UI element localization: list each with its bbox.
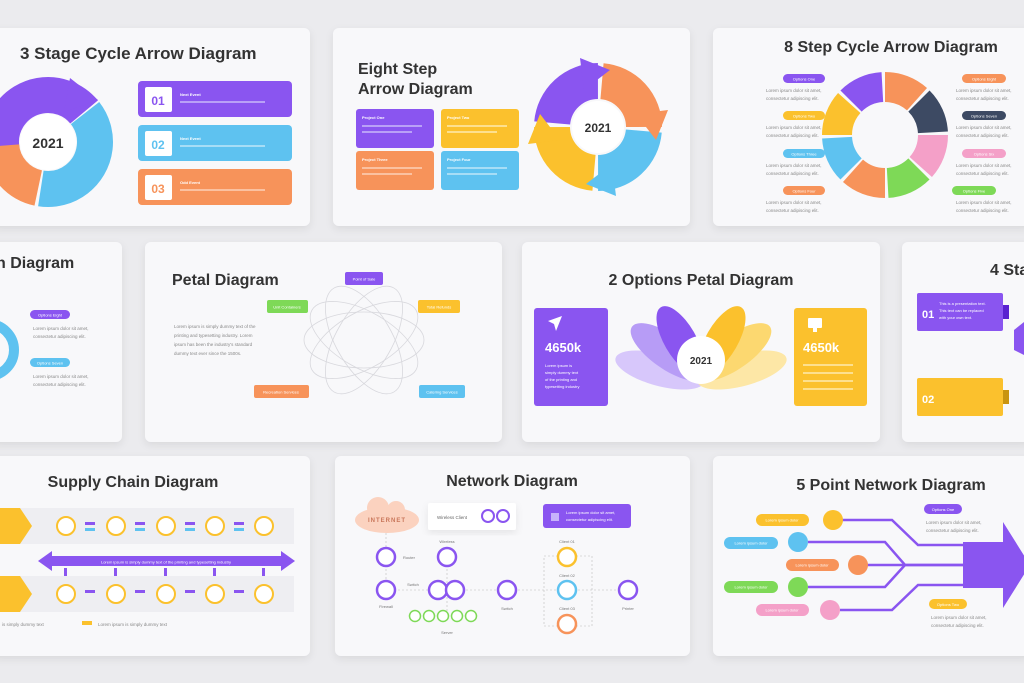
heading: supply chain: Supply Chain Diagram xyxy=(48,474,218,491)
box: stage 01: This text can be replaced xyxy=(939,308,984,313)
text: option one: consectetur adipiscing elit. xyxy=(926,528,979,533)
text block: petal description: ipsum has been the industry's standard xyxy=(174,342,253,347)
panel: 3 stage cycle arrow diagram xyxy=(0,28,310,226)
labels: left options: consectetur adipiscing elit. xyxy=(766,133,819,138)
card: purple stat: typesetting industry xyxy=(545,384,579,389)
labels: left options: Options Three xyxy=(791,152,817,156)
labels: right options: Lorem ipsum dolor sit amet, xyxy=(956,200,1012,205)
labels: options: consectetur adipiscing elit. xyxy=(33,382,86,387)
chart: 3 stage ring: 2021 xyxy=(32,135,64,151)
card: purple stat: 4650k xyxy=(545,340,582,355)
box: stage 01: with your own text. xyxy=(939,315,972,320)
text: option one: Lorem ipsum dolor sit amet, xyxy=(926,520,982,525)
heading: 3 stage: 3 Stage Cycle Arrow Diagram xyxy=(20,44,257,63)
labels: left options: Lorem ipsum dolor sit amet, xyxy=(766,88,822,93)
icon: internet cloud xyxy=(355,497,419,533)
labels: left options: consectetur adipiscing elit. xyxy=(766,171,819,176)
labels: right options xyxy=(952,74,1012,213)
labels: right options: consectetur adipiscing elit. xyxy=(956,208,1009,213)
labels: right options: Options Five xyxy=(963,188,986,194)
heading: network: Network Diagram xyxy=(446,473,578,490)
labels: left options xyxy=(766,74,825,213)
grid: four projects xyxy=(356,109,519,190)
text block: petal description: dummy text ever since the 1500s. xyxy=(174,351,241,356)
labels: petal nodes: Recreation Services xyxy=(263,390,299,394)
labels: options: Options Eight xyxy=(38,312,63,318)
panel: 4 stage cropped xyxy=(902,242,1024,442)
card: purple stat: Lorem ipsum is xyxy=(545,363,572,368)
labels: five pills: Lorem ipsum dolor xyxy=(765,608,799,612)
box: wireless client: Wireless Client xyxy=(437,515,468,520)
labels: right options: Options Six xyxy=(974,152,994,156)
callout: purple note: consectetur adipiscing elit. xyxy=(566,517,613,522)
labels: five pills: Lorem ipsum dolor xyxy=(734,540,768,546)
chart: network nodes: Server xyxy=(441,630,454,635)
card: yellow stat: 4650k xyxy=(803,340,840,355)
arrow: big purple xyxy=(963,522,1024,608)
legend: supply chain: Lorem ipsum is simply dummy text xyxy=(98,622,168,627)
panel: eight step arrow diagram xyxy=(333,28,690,226)
list: three events: 01 xyxy=(151,94,165,108)
labels: right options: Lorem ipsum dolor sit amet, xyxy=(956,163,1012,168)
chart: network nodes: Wireless xyxy=(439,539,455,544)
card: purple stat: of the printing and xyxy=(545,377,577,382)
box: wireless client xyxy=(428,503,516,530)
list: three events: Odd Event xyxy=(180,180,201,185)
box: stage 01: 01 xyxy=(922,309,934,321)
grid: four projects: Project Three xyxy=(362,157,388,162)
labels: left options: Lorem ipsum dolor sit amet, xyxy=(766,125,822,130)
labels: left options: Lorem ipsum dolor sit amet, xyxy=(766,200,822,205)
labels: options: Lorem ipsum dolor sit amet, xyxy=(33,374,89,379)
labels: right options: consectetur adipiscing elit. xyxy=(956,171,1009,176)
labels: left options: Lorem ipsum dolor sit amet, xyxy=(766,163,822,168)
row: bottom chain xyxy=(0,568,294,612)
panel: cropped diagram left xyxy=(0,242,122,442)
labels: petal nodes: Total Refunds xyxy=(427,304,451,310)
labels: left options: Options Four xyxy=(792,188,816,194)
arrow: double purple xyxy=(38,551,295,571)
heading: eight step: Arrow Diagram xyxy=(358,81,473,98)
labels: right options: consectetur adipiscing elit. xyxy=(956,96,1009,101)
heading: petal: Petal Diagram xyxy=(172,272,279,289)
callout: purple note: Lorem ipsum dolor sit amet, xyxy=(566,510,615,515)
chart: network nodes: Switch xyxy=(501,606,513,611)
labels: left options: Options Two xyxy=(793,114,816,118)
card: purple stat: simply dummy text xyxy=(545,370,579,375)
panel: 5 point network diagram xyxy=(713,456,1024,656)
text: option two xyxy=(929,599,987,628)
box: stage 01: This is a presentation text. xyxy=(939,301,986,306)
labels: options: Lorem ipsum dolor sit amet, xyxy=(33,326,89,331)
panel: network diagram xyxy=(335,456,690,656)
callout: purple note xyxy=(543,504,631,528)
chart: four arrow ring: 2021 xyxy=(585,121,612,135)
labels: petal nodes xyxy=(254,272,465,398)
text block: petal description: printing and typesetting industry. Lorem xyxy=(174,333,253,338)
labels: five pills: Lorem ipsum dolor xyxy=(734,584,768,590)
chart: network nodes: Client 03 xyxy=(559,606,576,611)
heading: 8 step: 8 Step Cycle Arrow Diagram xyxy=(784,39,998,56)
list: three events: Next Event xyxy=(180,136,201,141)
labels: five pills: Lorem ipsum dolor xyxy=(795,562,829,568)
labels: options xyxy=(30,310,89,387)
chart: network nodes: Client 02 xyxy=(559,573,576,578)
labels: options: consectetur adipiscing elit. xyxy=(33,334,86,339)
text: option two: consectetur adipiscing elit. xyxy=(931,623,984,628)
labels: right options: Lorem ipsum dolor sit amet, xyxy=(956,125,1012,130)
legend: supply chain xyxy=(2,621,168,627)
text block: petal description xyxy=(174,324,256,356)
legend: supply chain: is simply dummy text xyxy=(2,622,45,627)
grid: four projects: Project Two xyxy=(447,115,470,120)
chart: network nodes: Client 01 xyxy=(559,539,576,544)
list: three events: Next Event xyxy=(180,92,201,97)
text: option two: Lorem ipsum dolor sit amet, xyxy=(931,615,987,620)
chart: lotus petals: 2021 xyxy=(690,356,713,367)
labels: petal nodes: Unit Containers xyxy=(273,304,301,310)
card: purple stat xyxy=(534,308,608,406)
list: three events: 03 xyxy=(151,182,165,196)
icon: internet cloud: INTERNET xyxy=(368,518,406,524)
labels: five pills xyxy=(724,514,839,616)
panel: supply chain diagram xyxy=(0,456,310,656)
chart: partial ring xyxy=(0,324,14,376)
chart: network nodes: Router xyxy=(403,555,416,560)
text: option one: Options One xyxy=(932,507,955,512)
chart: four arrow ring xyxy=(528,58,668,196)
arrow: double purple: Lorem ipsum is simply dummy text of the printing and typesetting industry xyxy=(101,560,231,564)
panel: 2 options petal diagram xyxy=(522,242,880,442)
text: option two: Options Two xyxy=(937,602,960,607)
chart: network nodes: Switch xyxy=(407,582,419,587)
grid: four projects: Project One xyxy=(362,115,385,120)
box: stage 02 xyxy=(917,378,1009,416)
card: yellow stat xyxy=(794,308,867,406)
panel: petal diagram xyxy=(145,242,502,442)
box: stage 01 xyxy=(917,293,1009,331)
chart: network nodes: Printer xyxy=(622,606,635,611)
labels: left options: consectetur adipiscing elit. xyxy=(766,208,819,213)
chart: 8 segment ring xyxy=(817,67,953,203)
labels: left options: Options One xyxy=(793,76,816,82)
heading: eight step: Eight Step xyxy=(358,61,437,78)
chart: lotus petals xyxy=(611,299,791,397)
labels: five pills: Lorem ipsum dolor xyxy=(765,518,799,522)
box: stage 02: 02 xyxy=(922,394,934,406)
chart: petal lines xyxy=(298,274,430,406)
text block: petal description: Lorem ipsum is simply dummy text of the xyxy=(174,324,256,329)
chart: 3 stage ring xyxy=(0,76,114,208)
icons: five points xyxy=(788,510,868,620)
labels: options: Options Seven xyxy=(37,360,63,366)
grid: four projects: Project Four xyxy=(447,157,471,162)
labels: right options: consectetur adipiscing elit. xyxy=(956,133,1009,138)
row: top chain xyxy=(0,508,294,544)
labels: petal nodes: Catering Services xyxy=(426,390,458,394)
chart: network nodes xyxy=(377,533,637,635)
text: option one xyxy=(924,504,982,533)
labels: left options: consectetur adipiscing elit. xyxy=(766,96,819,101)
labels: right options: Options Eight xyxy=(972,76,997,82)
list: three events xyxy=(138,81,292,205)
labels: right options: Lorem ipsum dolor sit amet, xyxy=(956,88,1012,93)
chart: converging lines xyxy=(808,520,980,610)
labels: right options: Options Seven xyxy=(971,114,997,118)
heading: 5 point: 5 Point Network Diagram xyxy=(796,477,986,494)
list: three events: 02 xyxy=(151,138,165,152)
chart: network nodes: Firewall xyxy=(379,604,393,609)
panel: 8 step cycle arrow diagram xyxy=(713,28,1024,226)
labels: petal nodes: Point of Sale xyxy=(353,276,376,282)
heading: 2 options: 2 Options Petal Diagram xyxy=(609,272,793,289)
